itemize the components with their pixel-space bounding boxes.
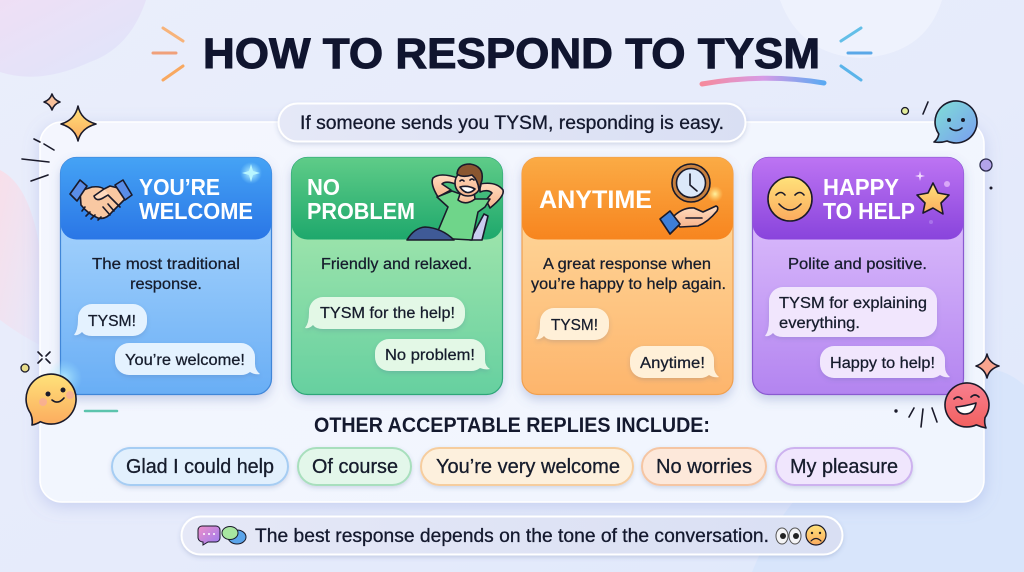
heading: happy to help bbox=[823, 174, 915, 224]
pill: no worries bbox=[642, 448, 766, 485]
chat bubble: TYSM for explaining bbox=[765, 287, 937, 337]
description bbox=[92, 256, 240, 293]
pill: of course: Of course bbox=[312, 456, 398, 478]
icon: right blue rays bbox=[841, 28, 871, 80]
heading: you're welcome: YOU’RE bbox=[139, 174, 220, 200]
heading: no problem: NO bbox=[307, 174, 340, 200]
main panel bbox=[40, 122, 984, 502]
chat bubble: TYSM: TYSM! bbox=[88, 313, 136, 330]
icon: relaxed man bbox=[407, 164, 503, 240]
chat bubble: TYSM bbox=[74, 304, 147, 336]
icon: sparkle bbox=[240, 162, 262, 184]
pill: glad I could help: Glad I could help bbox=[126, 456, 274, 478]
icon: eyes bbox=[776, 528, 801, 544]
heading: other replies: OTHER ACCEPTABLE REPLIES INCLUDE: bbox=[314, 414, 710, 437]
panel: happy to help bbox=[752, 158, 964, 394]
icon: sad face bbox=[806, 525, 826, 545]
title: HOW TO RESPOND TO TYSM bbox=[203, 30, 820, 78]
chat bubble: TYSM: TYSM! bbox=[551, 317, 598, 334]
heading: happy to help: HAPPY bbox=[823, 174, 899, 200]
pill: glad I could help bbox=[112, 448, 288, 485]
icon: handshake bbox=[70, 180, 132, 220]
chat bubble: no problem bbox=[375, 339, 490, 371]
chat bubble: TYSM for the help bbox=[305, 297, 465, 329]
motion lines right bbox=[894, 408, 937, 427]
reply pills bbox=[112, 448, 912, 485]
header: no problem bbox=[292, 158, 502, 240]
decorative marks bottom left bbox=[21, 352, 117, 411]
chat bubble: you're welcome: You’re welcome! bbox=[125, 352, 245, 369]
description bbox=[531, 256, 726, 293]
panel: you're welcome bbox=[60, 158, 272, 394]
chat bubble: TYSM for explaining: everything. bbox=[779, 315, 860, 332]
chat bubble: no problem: No problem! bbox=[385, 347, 475, 364]
chat bubble: TYSM bbox=[536, 308, 609, 340]
motion lines left bbox=[22, 139, 54, 181]
chat bubble: TYSM for the help: TYSM for the help! bbox=[320, 305, 455, 322]
panel: anytime bbox=[522, 158, 733, 394]
icon: blue smiley bubble bbox=[934, 101, 977, 143]
chat bubble: you're welcome bbox=[115, 343, 260, 375]
icon: pink sparkle right bbox=[976, 354, 999, 378]
icon: small sparkle top left bbox=[44, 94, 60, 110]
icon: clock in hand bbox=[660, 164, 723, 234]
footer text: The best response depends on the tone of the conversation. bbox=[255, 525, 769, 547]
chat bubble: anytime bbox=[630, 346, 719, 378]
pill: my pleasure bbox=[776, 448, 912, 485]
pill: my pleasure: My pleasure bbox=[790, 456, 898, 478]
heading: happy to help: TO HELP bbox=[823, 198, 915, 224]
description: The most traditional bbox=[92, 256, 240, 273]
icon: yellow smiley bubble bbox=[26, 360, 82, 425]
header: happy to help bbox=[752, 158, 964, 240]
chat bubble: happy to help: Happy to help! bbox=[830, 355, 935, 372]
icon: large sparkle top left bbox=[61, 106, 96, 141]
chat bubble: TYSM for explaining: TYSM for explaining bbox=[779, 295, 927, 312]
description: response. bbox=[130, 276, 202, 293]
pill: you're very welcome: You’re very welcome bbox=[436, 456, 620, 478]
icon: smiling face bbox=[768, 177, 812, 221]
icon: pink laughing bubble bbox=[945, 383, 989, 428]
icon: chat bubbles bbox=[198, 526, 246, 545]
decorative dots top right bbox=[902, 102, 992, 190]
description: you’re happy to help again. bbox=[531, 276, 726, 293]
heading: anytime: ANYTIME bbox=[539, 186, 652, 214]
description: Friendly and relaxed. bbox=[321, 256, 472, 273]
chat bubble: anytime: Anytime! bbox=[640, 355, 705, 372]
pill: no worries: No worries bbox=[656, 456, 752, 478]
subtitle pill bbox=[278, 104, 746, 142]
icon: left orange rays bbox=[153, 28, 183, 80]
heading: no problem bbox=[307, 174, 415, 224]
chat bubble: happy to help bbox=[820, 346, 950, 378]
heading: you're welcome bbox=[139, 174, 253, 224]
pill: of course bbox=[298, 448, 411, 485]
heading: you're welcome: WELCOME bbox=[139, 198, 253, 224]
pill: you're very welcome bbox=[421, 448, 633, 485]
header: anytime bbox=[522, 158, 733, 240]
description: Polite and positive. bbox=[788, 256, 927, 273]
icon: star bbox=[915, 171, 950, 224]
title underline bbox=[702, 78, 824, 84]
heading: no problem: PROBLEM bbox=[307, 198, 415, 224]
header: you're welcome bbox=[60, 158, 272, 240]
footer pill bbox=[182, 516, 842, 554]
subtitle pill: If someone sends you TYSM, responding is easy. bbox=[300, 113, 724, 134]
panel: no problem bbox=[292, 158, 503, 394]
description: A great response when bbox=[543, 256, 711, 273]
